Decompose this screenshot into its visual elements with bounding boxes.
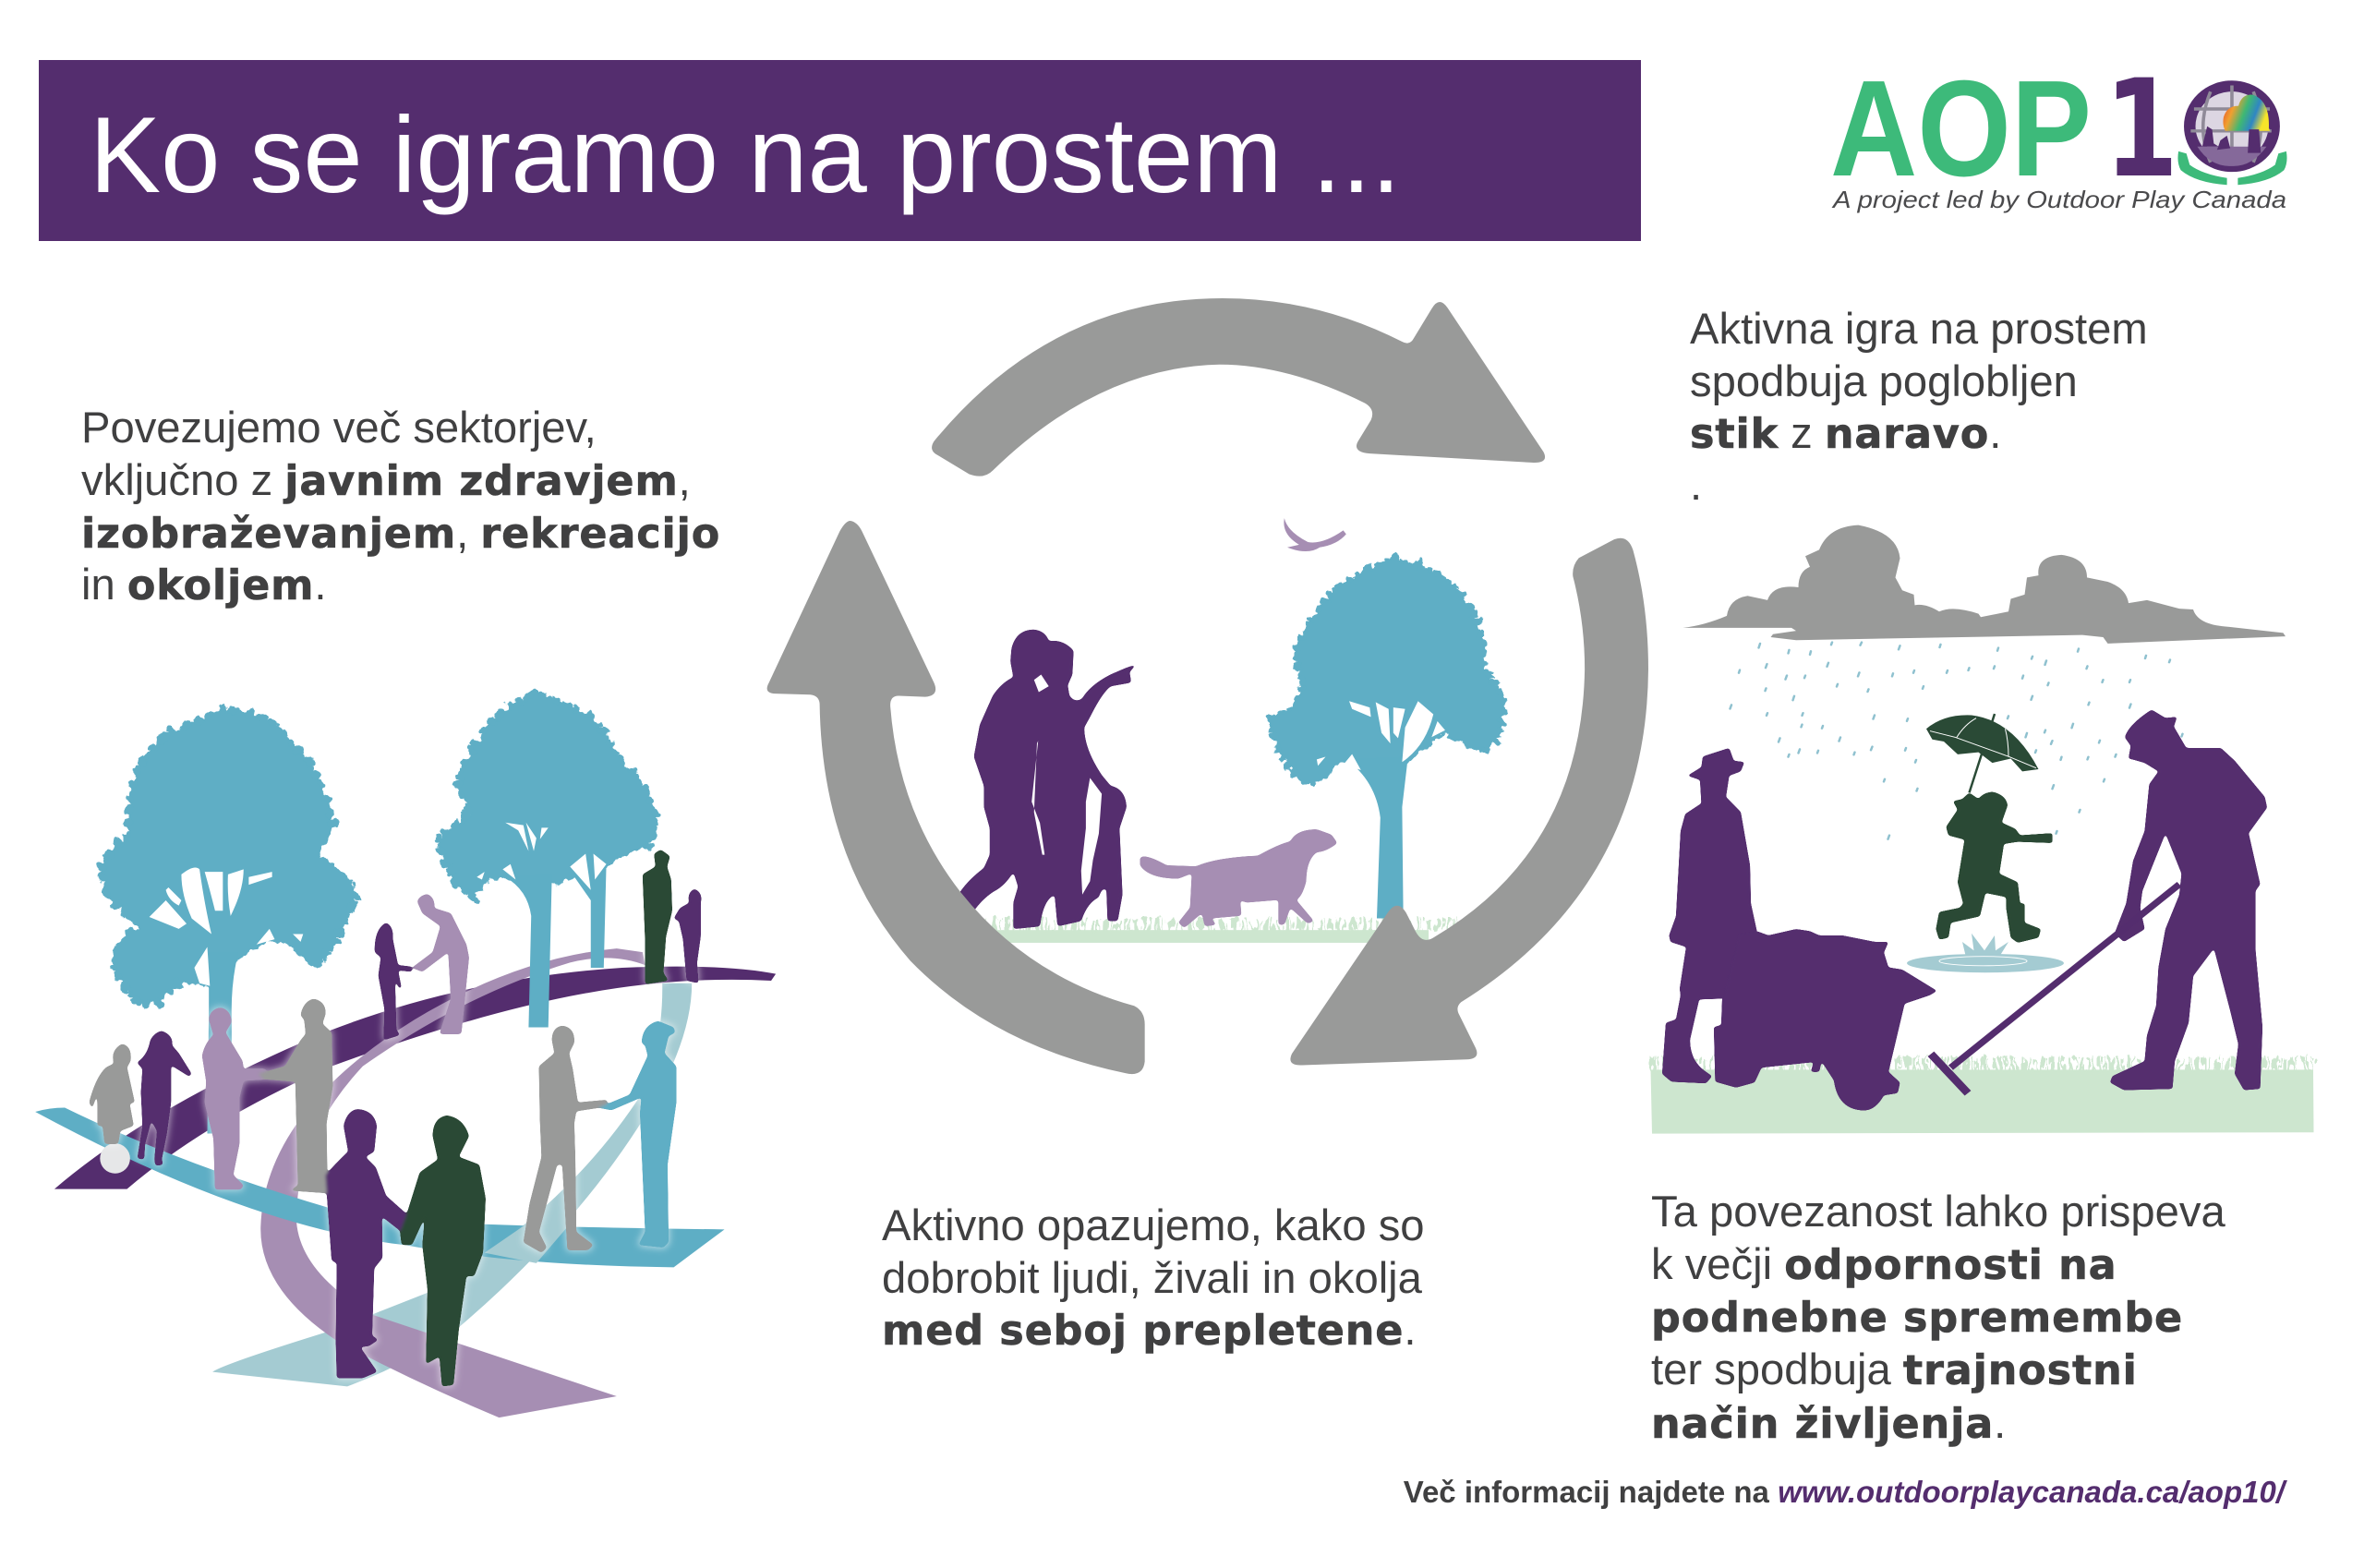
- green man on the hill: [643, 850, 672, 984]
- woman with hat: [1662, 748, 1756, 1083]
- teal person right: [598, 1021, 676, 1248]
- illustration: people and paths: [35, 694, 776, 1417]
- family silhouette: [958, 630, 1137, 929]
- tree: large left: [101, 708, 357, 1134]
- cycle arrow: left: [767, 521, 1145, 1074]
- logo: AOP10: [1830, 51, 2287, 213]
- cycle arrow: top: [932, 298, 1545, 476]
- cloud: [1683, 525, 2286, 644]
- text block: climate resilience: ter spodbuja trajnostni: [1651, 1345, 2138, 1394]
- gray man right: [524, 1026, 608, 1253]
- text block: climate resilience: k večji odpornosti na: [1651, 1240, 2117, 1289]
- large purple man: [325, 1109, 409, 1378]
- text block: observing wellbeing: dobrobit ljudi, živali in okolja: [882, 1254, 1423, 1303]
- logo tagline: A project led by Outdoor Play Canada: [1831, 186, 2286, 213]
- tree: right pair: [438, 694, 658, 1027]
- text block: sectors: in okoljem.: [81, 561, 327, 609]
- logo letters AOP: AOP: [1830, 53, 2092, 205]
- grass: [1651, 1065, 2314, 1134]
- grass: [981, 924, 1458, 943]
- illustration: rain, gardeners and child: [1651, 525, 2314, 1134]
- ribbon: teal path: [35, 1107, 725, 1267]
- people group: [90, 850, 701, 1386]
- text block: observing wellbeing: med seboj prepletene.: [882, 1306, 1416, 1355]
- illustration: family, dog and tree: [767, 298, 1648, 1074]
- title banner: [39, 60, 1641, 241]
- ribbon: light purple path: [260, 948, 645, 1417]
- ribbon crossing patch: [485, 1216, 576, 1263]
- child on the hill: [674, 889, 701, 983]
- ribbon: dark purple path: [54, 967, 776, 1189]
- text block: sectors: Povezujemo več sektorjev,: [81, 404, 597, 452]
- wheelbarrow: [1714, 929, 1937, 1111]
- ball: [100, 1143, 130, 1174]
- girl: [137, 1031, 192, 1165]
- text block: connection with nature: stik z naravo.: [1690, 409, 2001, 458]
- title: Ko se igramo na prostem ...: [90, 94, 1401, 215]
- text block: climate resilience: Ta povezanost lahko prispeva: [1651, 1188, 2225, 1236]
- footer link line: Več informacij najdete na www.outdoorplaycanada.ca/aop10/: [1404, 1475, 2288, 1509]
- man shaking hands: [258, 999, 332, 1193]
- small girl on the bridge: [375, 923, 412, 1041]
- text block: sectors: izobraževanjem, rekreacijo: [81, 509, 720, 558]
- child jumping: [1936, 792, 2052, 943]
- text block: connection with nature: spodbuja poglobljen: [1690, 357, 2078, 406]
- text block: observing wellbeing: Aktivno opazujemo, kako so: [882, 1201, 1425, 1250]
- woman shaking hands: [202, 1007, 269, 1189]
- text block: sectors: vključno z javnim zdravjem,: [81, 456, 691, 505]
- man with rake: [1931, 709, 2267, 1093]
- bird: [1284, 518, 1346, 551]
- cycle arrow: right: [1290, 538, 1648, 1066]
- child with ball: [90, 1043, 135, 1144]
- text block: climate resilience: podnebne spremembe: [1651, 1295, 2183, 1342]
- logo digit 1: 1: [2105, 51, 2178, 208]
- adult bending: [412, 894, 469, 1034]
- large green woman: [400, 1116, 486, 1386]
- dog: [1140, 829, 1337, 928]
- rain: [1731, 643, 2183, 839]
- text block: climate resilience: način življenja.: [1651, 1399, 2006, 1448]
- umbrella: [1926, 714, 2039, 792]
- ribbon: light teal path: [212, 983, 692, 1386]
- text block: connection with nature: Aktivna igra na prostem: [1690, 305, 2148, 354]
- puddle and splash: [1907, 934, 2064, 972]
- text block: connection with nature: .: [1690, 461, 1702, 510]
- tree: [1269, 558, 1505, 919]
- logo globe emblem: [2177, 85, 2287, 185]
